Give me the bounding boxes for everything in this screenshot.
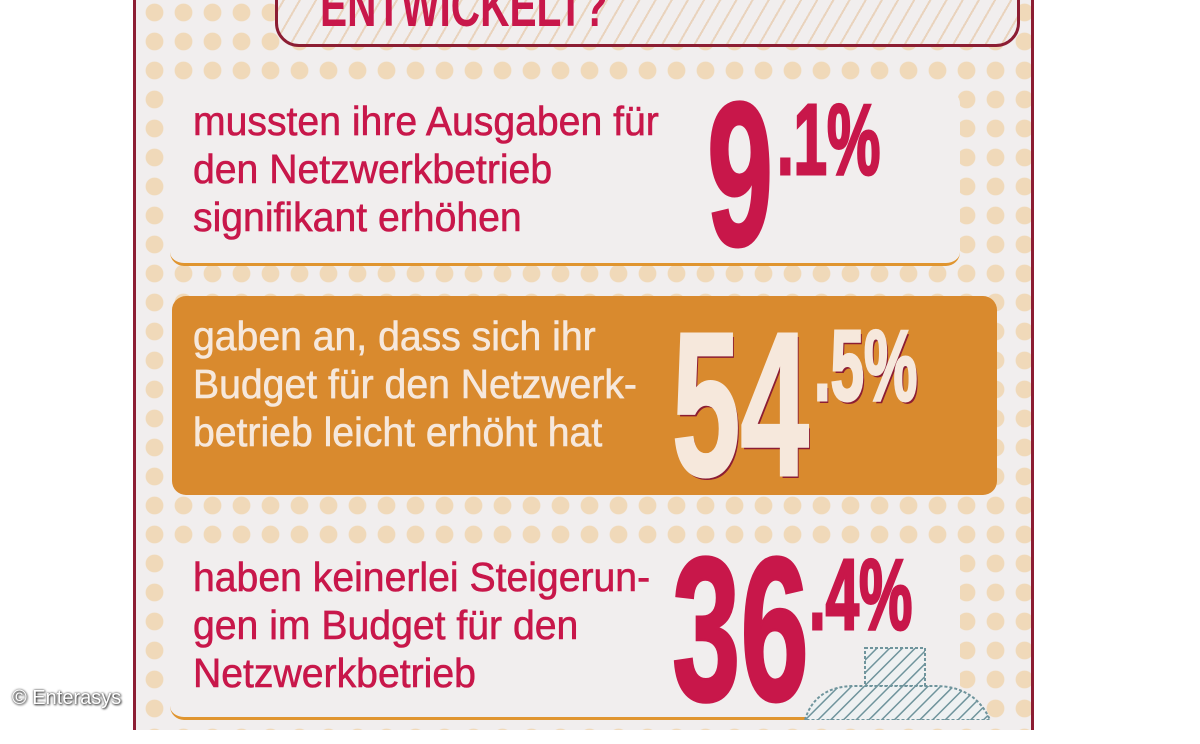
text 3	[193, 554, 650, 696]
card 1: .1%	[777, 84, 880, 196]
text 1: mussten ihre Ausgaben für	[193, 98, 659, 144]
number 36.4%	[672, 515, 912, 744]
text 2	[193, 313, 637, 455]
copyright: © Enterasys	[12, 687, 121, 709]
card 1: 9	[707, 60, 773, 289]
card 2: 54	[672, 290, 809, 519]
text 3: gen im Budget für den	[193, 602, 578, 648]
text 1: den Netzwerkbetrieb	[193, 146, 552, 192]
text 2: betrieb leicht erhöht hat	[193, 409, 602, 455]
text 3: Netzwerkbetrieb	[193, 650, 476, 696]
card 3	[170, 545, 960, 720]
icon: hatched device	[804, 647, 990, 720]
text 2: gaben an, dass sich ihr	[193, 313, 596, 359]
number 54.5%	[672, 290, 918, 519]
card 3: .4%	[809, 539, 912, 651]
card 1	[170, 90, 960, 266]
number 9.1%	[707, 60, 880, 289]
text 1: signifikant erhöhen	[193, 194, 522, 240]
text 3: haben keinerlei Steigerun-	[193, 554, 650, 600]
text 2: Budget für den Netzwerk-	[193, 361, 637, 407]
main panel	[133, 0, 1034, 730]
text 1	[193, 98, 659, 240]
card 2	[172, 296, 997, 495]
card 3: 36	[672, 515, 809, 744]
card 2: .5%	[814, 310, 917, 422]
title box	[275, 0, 1020, 47]
